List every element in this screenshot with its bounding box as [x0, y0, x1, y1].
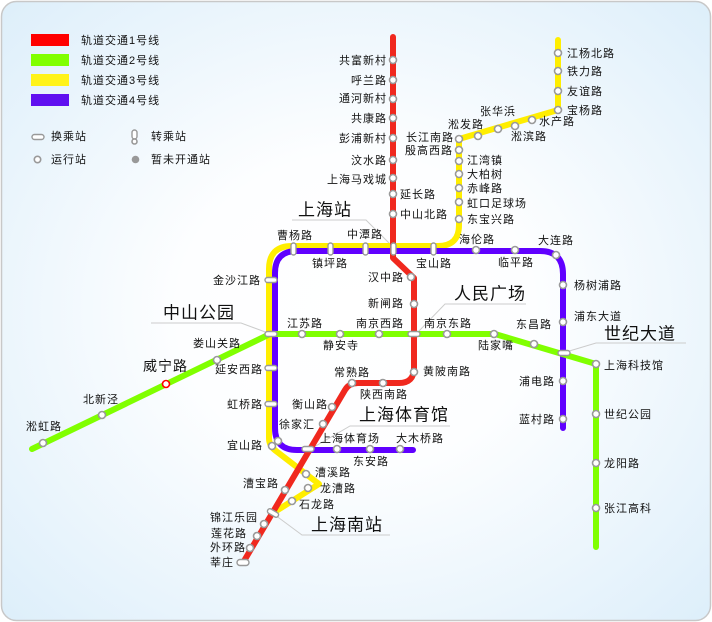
station labels: line 1: 锦江乐园	[210, 510, 258, 524]
stations: line 1	[237, 56, 418, 566]
station labels: line 2	[26, 316, 664, 515]
station labels: line 3: 宝杨路	[567, 103, 603, 117]
station labels: line 1: 汉中路	[368, 271, 404, 284]
station labels: line 1: 共康路	[351, 111, 387, 125]
station labels: line 1: 新闸路	[368, 296, 404, 310]
station labels: line 2: 上海科技馆	[604, 358, 664, 372]
station labels: line 3: 赤峰路	[467, 182, 503, 195]
station labels: line 4: 浦东大道	[574, 309, 622, 323]
station labels: line 2: 张江高科	[604, 501, 652, 515]
station labels: line 4: 杨树浦路	[574, 278, 622, 292]
station labels: line 4: 宝山路	[416, 256, 452, 270]
station labels: line 3: 淞发路	[448, 117, 484, 131]
station labels: line 2: 世纪公园	[604, 408, 652, 421]
station labels: line 3: 石龙路	[299, 498, 335, 511]
station labels: line 1: 中山北路	[400, 208, 448, 221]
station labels: line 4: 中潭路	[347, 228, 383, 241]
station labels: line 4: 金沙江路	[213, 273, 261, 287]
line 2 green	[32, 334, 596, 547]
station labels: line 4: 大木桥路	[396, 431, 444, 445]
station labels: line 1: 漕宝路	[243, 476, 279, 490]
stations: line 3	[268, 50, 562, 504]
legend: line 3: 轨道交通3号线	[81, 73, 160, 87]
station labels: line 4: 蓝村路	[519, 412, 555, 426]
station labels: line 1: 外环路	[210, 541, 246, 554]
station labels: line 2: 静安寺	[323, 338, 359, 352]
legend: line 4: 轨道交通4号线	[81, 93, 160, 107]
callout: Century Avenue: 世纪大道	[604, 324, 676, 344]
callout leader lines	[151, 220, 686, 535]
legend: operating station: 运行站	[51, 152, 87, 166]
interchange pills	[265, 243, 570, 518]
station labels: line 2: 延安西路	[215, 362, 263, 376]
callout: People's Square: 人民广场	[454, 284, 526, 304]
station labels: line 2: 南京东路	[424, 316, 472, 330]
station labels: line 2: 龙阳路	[604, 457, 640, 470]
station labels: line 4: 浦电路	[519, 375, 555, 388]
station labels: line 3: 江湾镇	[467, 153, 503, 167]
station labels: line 4: 曹杨路	[277, 228, 313, 242]
station labels: line 1: 上海马戏城	[327, 172, 387, 186]
station labels: line 3: 虹口足球场	[467, 196, 527, 210]
station labels: line 3: 漕溪路	[315, 465, 351, 479]
station labels: line 2: 陆家嘴	[478, 338, 514, 352]
legend: transfer station: 转乘站	[151, 129, 187, 143]
station labels: line 3: 江杨北路	[567, 46, 615, 60]
station labels: line 3: 殷高西路	[405, 143, 453, 157]
legend: operating station	[34, 152, 87, 166]
station labels: line 1: 黄陂南路	[423, 364, 471, 378]
legend: line 2: 轨道交通2号线	[81, 53, 160, 67]
station labels: line 1: 陕西南路	[360, 387, 408, 401]
station labels: line 2: 北新泾	[83, 392, 119, 406]
stations: line 2	[40, 330, 600, 512]
legend: interchange station: 换乘站	[51, 129, 87, 143]
station labels: line 4: 上海体育场	[320, 431, 380, 445]
legend: line 1: 轨道交通1号线	[81, 33, 160, 47]
station labels: line 1: 通河新村	[339, 91, 387, 105]
station labels: line 1: 衡山路	[292, 398, 328, 411]
station labels: line 1: 常熟路	[334, 365, 370, 379]
station labels: line 4: 镇坪路	[312, 256, 348, 270]
station labels: line 3: 大柏树	[467, 167, 503, 181]
station labels: line 2: 淞虹路	[26, 420, 62, 433]
station labels: line 1: 共富新村	[339, 53, 387, 67]
station labels: line 3: 东宝兴路	[467, 212, 515, 226]
station labels: line 1: 莲花路	[211, 527, 247, 540]
legend: line 3	[31, 73, 160, 87]
legend: station not yet open	[132, 152, 211, 166]
station labels: line 3: 铁力路	[567, 65, 603, 78]
station labels: line 4: 海伦路	[459, 232, 495, 246]
station labels: line 2: 娄山关路	[193, 336, 241, 350]
station labels: line 3: 张华浜	[480, 104, 516, 118]
station labels: line 3: 水产路	[539, 114, 575, 128]
legend: line 1	[31, 33, 160, 47]
station labels: line 4: 大连路	[538, 233, 574, 247]
station labels: line 1: 彭浦新村	[339, 131, 387, 145]
station labels: line 4: 临平路	[498, 255, 534, 269]
legend: line 4	[31, 93, 160, 107]
station labels: line 2: 江苏路	[287, 317, 323, 330]
station labels: line 3: 长江南路	[406, 131, 454, 144]
callout: Shanghai Stadium: 上海体育馆	[359, 406, 449, 424]
station labels: line 3	[299, 46, 615, 511]
legend: interchange station	[32, 129, 87, 143]
station labels: line 1: 呼兰路	[351, 74, 387, 87]
station labels: line 2: 南京西路	[356, 316, 404, 330]
station labels: line 1: 徐家汇	[279, 417, 315, 431]
station labels: line 4: 东安路	[353, 454, 389, 468]
legend: line 2	[31, 53, 160, 67]
station labels: line 1: 莘庄	[210, 555, 234, 569]
station labels: line 3: 友谊路	[567, 84, 603, 98]
legend: station not yet open: 暂未开通站	[151, 152, 211, 166]
station labels: line 2: 虹桥路	[227, 398, 263, 411]
callout: Shanghai Station: 上海站	[298, 200, 352, 220]
callout: Shanghai South Station: 上海南站	[311, 516, 383, 534]
station labels: line 2: 东昌路	[516, 318, 552, 331]
line 4 purple	[275, 251, 563, 450]
callout: Zhongshan Park: 中山公园	[163, 304, 235, 322]
station labels: line 4: 宜山路	[227, 438, 263, 452]
legend	[31, 33, 211, 166]
line 1 red	[244, 37, 414, 561]
station labels: line 1: 汶水路	[351, 153, 387, 167]
station labels: line 1: 延长路	[400, 188, 436, 201]
station labels: line 3: 淞滨路	[511, 129, 547, 143]
station labels: line 1	[210, 53, 471, 569]
callout: Weining Road: 威宁路	[143, 358, 188, 374]
line 3 yellow	[269, 40, 558, 513]
stations: line 4	[274, 246, 566, 452]
legend: transfer station	[132, 129, 187, 144]
station labels: line 3: 龙漕路	[320, 481, 356, 495]
station labels: line 4	[213, 228, 622, 468]
